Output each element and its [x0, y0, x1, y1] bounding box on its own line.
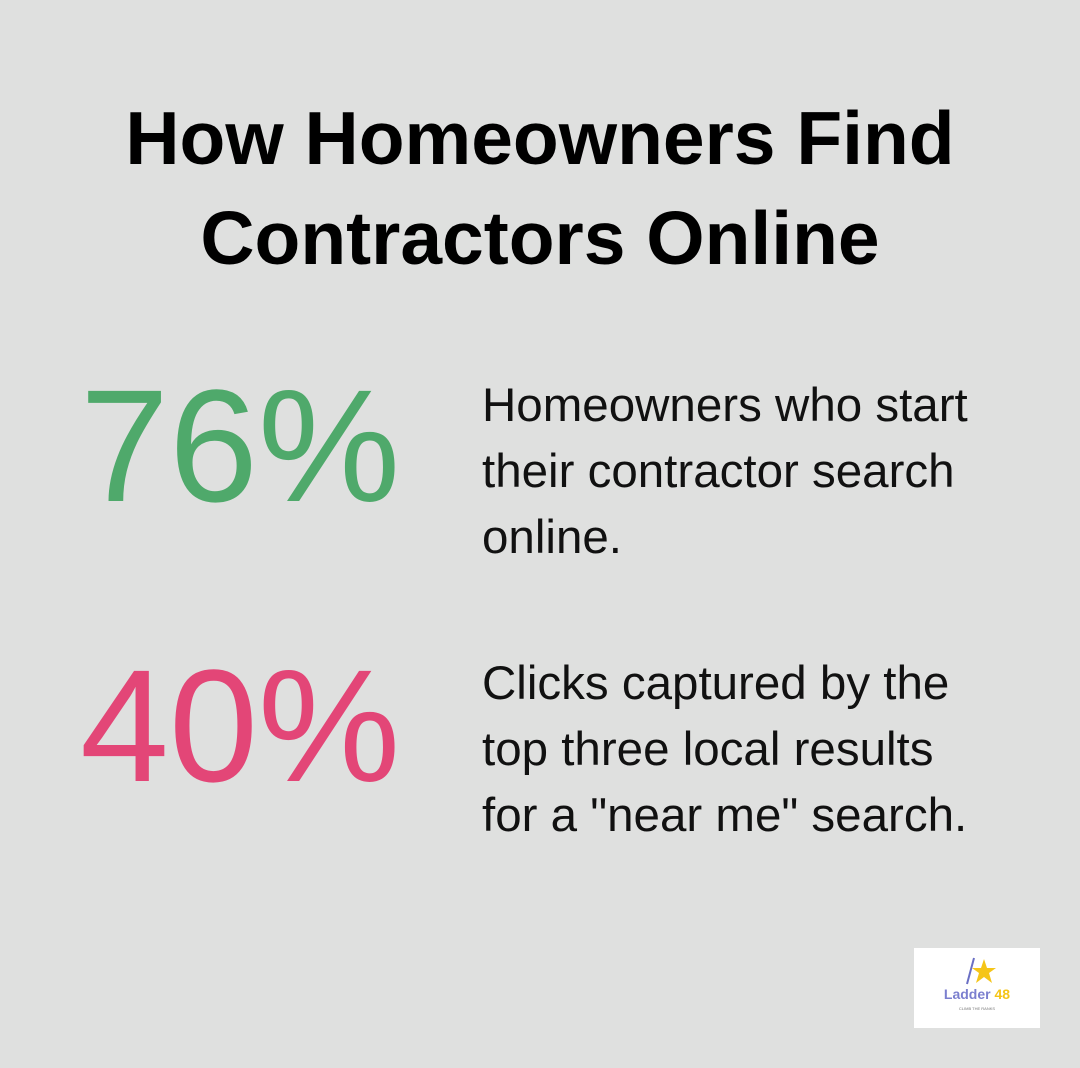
- text: tagline: CLIMB THE RANKS: [959, 1006, 995, 1011]
- text: logo name: Ladder 48: [944, 986, 1010, 1002]
- text: 40% description: [482, 657, 967, 842]
- stat: 40%: 40%: [80, 636, 400, 815]
- text: 40% description: Clicks captured by the: [482, 657, 949, 710]
- text: 76% description: online.: [482, 511, 622, 564]
- icon: ladder star: [966, 958, 996, 984]
- text: 40% description: for a "near me" search.: [482, 789, 967, 842]
- text: 76% description: their contractor search: [482, 445, 955, 498]
- title: How Homeowners Find: [125, 96, 955, 180]
- logo: Ladder 48: [914, 948, 1040, 1028]
- stat: 76%: 76%: [80, 356, 400, 535]
- text: 76% description: Homeowners who start: [482, 379, 968, 432]
- title: Contractors Online: [200, 196, 880, 280]
- text: 76% description: [482, 379, 968, 564]
- title: [125, 96, 955, 280]
- text: 40% description: top three local results: [482, 723, 933, 776]
